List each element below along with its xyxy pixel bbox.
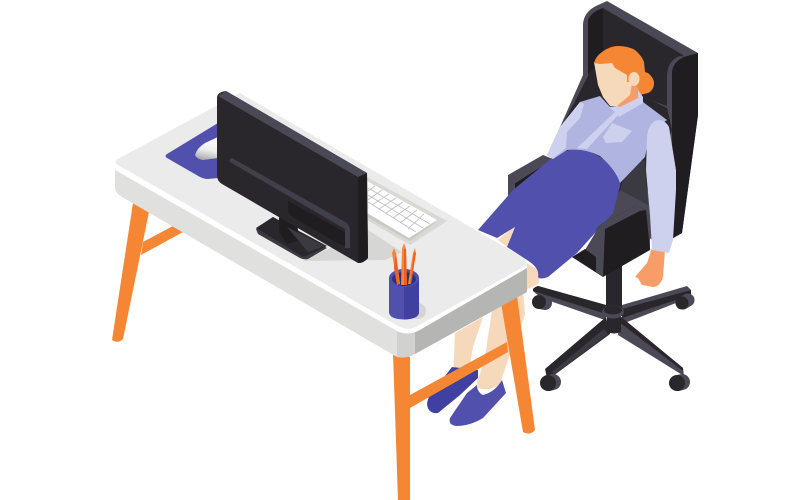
cup rim — [389, 269, 419, 287]
monitor shadow — [303, 230, 402, 261]
desk top — [116, 93, 527, 329]
mouse pad — [166, 123, 218, 179]
woman — [427, 46, 676, 426]
monitor ridge — [229, 158, 350, 248]
hand — [635, 248, 665, 287]
desk apron — [115, 166, 397, 357]
desk top edge — [115, 164, 527, 334]
chair backrest — [553, 1, 698, 246]
chair seat — [585, 190, 650, 262]
face — [594, 62, 632, 106]
ear — [628, 72, 640, 86]
chair seat edge — [572, 249, 603, 277]
neck — [617, 84, 641, 107]
right armrest — [596, 207, 650, 277]
chair back lower — [620, 160, 648, 205]
pencil cup — [389, 243, 426, 320]
right shoe — [450, 380, 506, 426]
office chair — [508, 1, 698, 391]
pencils — [392, 243, 416, 285]
shirt placket — [577, 112, 618, 149]
legs — [453, 226, 540, 389]
collar — [609, 90, 643, 117]
chair casters — [532, 295, 688, 391]
desk legs — [112, 203, 535, 500]
shirt sleeve: right arm — [646, 120, 676, 253]
monitor panel — [288, 201, 345, 246]
monitor stand — [256, 200, 327, 259]
monitor — [217, 91, 368, 263]
hair — [594, 46, 654, 95]
left armrest — [508, 155, 553, 198]
shirt pocket — [603, 123, 632, 143]
left shoe — [427, 367, 478, 413]
mouse — [195, 137, 218, 160]
chair base — [533, 265, 691, 378]
cup shadow — [410, 303, 426, 319]
cup body — [389, 277, 419, 320]
desk — [112, 93, 535, 500]
keyboard — [367, 181, 437, 241]
keyboard shadow — [367, 177, 447, 245]
shirt body — [547, 96, 667, 183]
shirt sleeve: left — [547, 102, 584, 159]
skirt — [478, 149, 620, 278]
